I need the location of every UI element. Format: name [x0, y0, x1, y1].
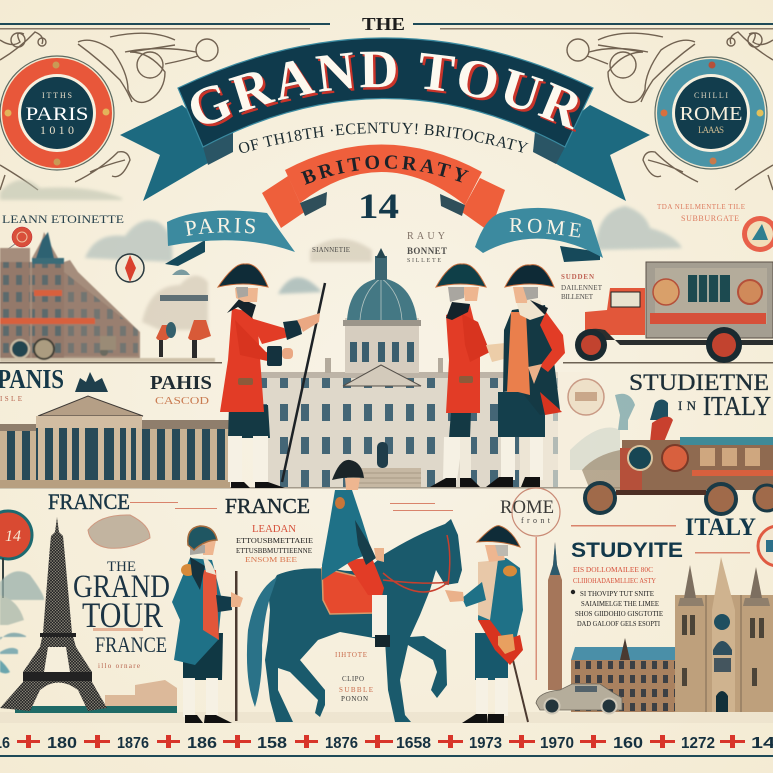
medallion: Paris [0, 56, 114, 170]
caption: Rome circle [500, 488, 560, 680]
timeline: 180 [47, 735, 77, 752]
caption: Rome circle: ROME [500, 497, 554, 518]
left badge 14: 14 [5, 528, 21, 545]
figure: rider on horse [247, 460, 462, 722]
timeline: 1970 [540, 735, 574, 752]
ground strip [0, 712, 773, 723]
horse tail [247, 577, 277, 707]
truck windows [688, 275, 730, 302]
heading: Studietne in Italy: IN [678, 398, 697, 413]
rider coat [322, 490, 372, 580]
medallion: Rome: ROME [680, 103, 742, 125]
captions under horse: SUBBLE [339, 686, 373, 694]
small text block: Leadan: ETTOUSBMETTAEIE [236, 536, 313, 545]
captions under horse: IIHTOTE [335, 651, 367, 659]
timeline: 158 [257, 735, 287, 752]
timeline: 160 [613, 735, 643, 752]
coat [172, 558, 222, 665]
left badge 14 [0, 511, 32, 598]
subtitle: OF TH18TH ·ECENTUY! BRITOCRATY [238, 122, 528, 153]
timeline red crosses [17, 735, 745, 748]
medallion: Rome [655, 57, 767, 169]
timeline: 1272 [681, 735, 715, 752]
figure: man in red coat shaking hands [430, 264, 508, 487]
reins [383, 535, 450, 592]
banner right tail [533, 105, 650, 201]
small text block: Studyite: DAD GALOOF GELS ESOPTI [577, 619, 660, 628]
label: Leann Etoinette: LEANN ETOINETTE [2, 212, 124, 226]
small caption texts: SUDDEN [561, 273, 594, 281]
hat [477, 526, 520, 547]
chimney [325, 358, 331, 373]
horse [265, 519, 462, 722]
head [203, 540, 216, 555]
timeline: 1876 [117, 735, 149, 752]
figure: man in navy and red coat [486, 265, 565, 487]
timeline: 14 [751, 735, 773, 752]
saddle [322, 568, 375, 614]
main title banner [120, 37, 650, 201]
banner left tail [120, 105, 233, 201]
the grand tour france text block: FRANCE [95, 632, 167, 657]
carriage wheels [11, 340, 29, 358]
statue silhouette [75, 372, 108, 392]
heading: Studyite: STUDYITE [571, 539, 683, 562]
timeline: 1973 [469, 735, 502, 752]
small text block: Studyite: SAIAIMELGE THE LIMEE [581, 599, 659, 608]
caption left: ISLE [0, 395, 22, 403]
parade wagon [582, 400, 773, 514]
stockings [228, 436, 242, 482]
small caption texts: BILLENET [561, 293, 594, 301]
hands [297, 313, 320, 332]
bottom timeline rule [0, 755, 773, 757]
small caption texts: SUBBURGATE [681, 214, 739, 223]
top rule right [413, 23, 773, 30]
temple [0, 396, 230, 488]
rider hat [332, 460, 364, 480]
small caption texts: DAILENNET [561, 284, 603, 292]
small caption texts: SILLETE [407, 258, 441, 264]
heading: Studietne in Italy: STUDIETNE [629, 370, 769, 395]
hat [188, 526, 217, 550]
orange ribbon text: BRITOCRATY [300, 155, 469, 185]
heading: Studietne in Italy [629, 370, 771, 421]
distant gate and people [142, 270, 211, 358]
small caption texts: RAUY [407, 231, 445, 242]
medallion: Paris: PARIS [26, 104, 88, 125]
orange ribbon [262, 144, 505, 228]
flourish: top right [567, 32, 773, 190]
vintage car [536, 684, 622, 714]
medallion: Rome: CHILLI [694, 91, 728, 100]
section rules [0, 362, 773, 488]
the grand tour france text block: GRAND [73, 569, 170, 605]
timeline [0, 735, 773, 752]
ribbon: Paris [165, 210, 295, 266]
balloon cloud [88, 515, 150, 548]
eiffel tower [0, 517, 177, 713]
heading: Paris small: PAHIS [150, 372, 212, 394]
heading: THE: THE [362, 14, 405, 34]
cane [511, 652, 528, 722]
heading: France centre: FRANCE [225, 494, 310, 518]
decorative red rules [130, 502, 750, 554]
small text block: Studyite: EIS DOLLOMAILEE 80C [573, 565, 653, 574]
small text block: Studyite: SI THOVIPY TUT SNITE [580, 589, 654, 598]
brick building [571, 638, 675, 712]
small caption texts: SIANNETIE [312, 246, 350, 254]
figure: man in red coat with cane [218, 264, 325, 488]
brick tower [548, 542, 562, 690]
caption red: illo ornare [98, 662, 140, 670]
breeches [228, 405, 270, 438]
medallion: Paris: ITTHS [42, 91, 72, 100]
cane [282, 283, 325, 482]
ribbon label Rome: ROME [510, 218, 581, 238]
small text block: Leadan: ETTUSBBMUTTIEENNE [236, 546, 312, 555]
right edge medallion [758, 526, 773, 566]
rider head [345, 478, 360, 490]
timeline: 1876 [325, 735, 358, 752]
dome drum [345, 318, 419, 373]
the grand tour france text block: TOUR [82, 595, 163, 635]
hat [218, 264, 268, 287]
timeline: 1658 [396, 735, 431, 752]
cathedral [675, 557, 773, 712]
collar [227, 298, 256, 318]
shoes [231, 482, 250, 488]
town beside tower [105, 680, 177, 706]
ribbon label Paris: PARIS [184, 218, 255, 236]
captions under horse [335, 651, 373, 703]
central pediment [347, 384, 421, 472]
wagon rider [650, 400, 668, 420]
small text block: Leadan: LEADAN [252, 524, 296, 535]
small caption texts: TDA NLELMENTLE TILE [657, 203, 745, 211]
left decorative clouds [0, 571, 44, 674]
number 14: 14 [358, 186, 399, 226]
cuffs [283, 320, 302, 340]
the grand tour france text block: THE [107, 559, 136, 575]
small caption texts: BONNET [407, 246, 447, 256]
caption under Paris: CASCOD [155, 396, 209, 407]
heading: Italy: ITALY [685, 514, 756, 541]
head [485, 545, 505, 562]
small text block: Studyite: SHOS GIIDOHIO GISGTOTIE [575, 609, 663, 618]
small text block: Studyite [571, 565, 663, 628]
small text block: Leadan [236, 524, 313, 564]
medallion: Rome: LAAAS [698, 125, 724, 135]
delivery truck [573, 262, 773, 363]
truck cab [585, 288, 645, 335]
banner title text shadow: GRAND TOUR [198, 54, 580, 132]
small text block: Studyite: CLIIIOHADAEMLLIEC ASTY [573, 576, 656, 585]
top rule left [0, 23, 330, 30]
captions under horse: PONON [341, 695, 368, 703]
palace with dome [258, 248, 590, 487]
coat [478, 558, 523, 640]
faded badge and statue [568, 379, 635, 470]
wagon wheels [585, 483, 615, 513]
caption: Rome circle: front [521, 516, 551, 525]
small caption texts [312, 203, 745, 301]
building: Paris street top left [0, 232, 215, 362]
rider breeches [345, 558, 384, 596]
medallion: Paris: 1010 [40, 123, 74, 137]
clouds behind ribbons [0, 180, 682, 294]
coat [220, 308, 264, 412]
figure: standing man holding reins [445, 526, 528, 723]
banner title text: GRAND TOUR [190, 52, 578, 130]
head [235, 288, 258, 302]
captions under horse: CLIPO [342, 675, 364, 683]
dome [347, 278, 417, 320]
flourish: top left [0, 32, 218, 190]
the grand tour france text block [73, 559, 170, 657]
small badges [4, 216, 773, 282]
cane [235, 571, 238, 721]
small text block: Leadan: ENSOM BEE [245, 555, 298, 564]
timeline: 186 [187, 735, 217, 752]
truck decorations [653, 279, 679, 305]
figure: standing man in teal coat [172, 526, 243, 723]
ribbon: Rome [475, 208, 603, 262]
heading: France left: FRANCE [48, 489, 130, 514]
truck wheels [575, 329, 607, 361]
